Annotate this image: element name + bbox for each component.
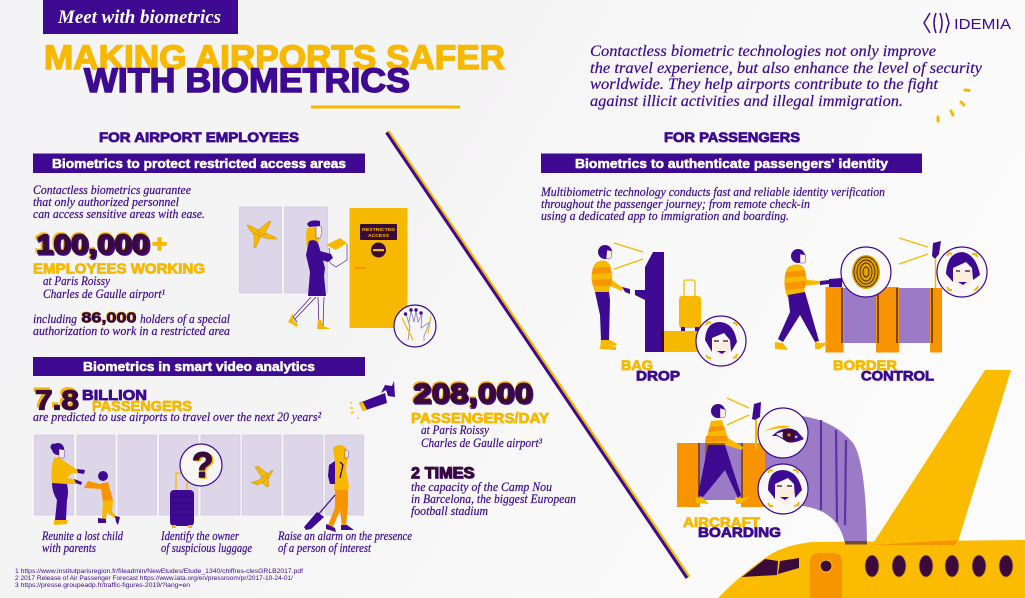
stat: 2 times: 2 TIMES — [411, 466, 475, 482]
label: bag drop: BAG — [621, 357, 653, 373]
stat: 100,000+ employees: Charles de Gaulle airport¹ — [43, 287, 165, 301]
stat: 7.8 billion passengers: BILLION — [82, 388, 147, 404]
text block: contactless: can access sensitive areas with ease. — [33, 207, 205, 221]
illustration: suspicious luggage — [170, 444, 222, 528]
intro text — [590, 43, 983, 110]
stat: 7.8 billion passengers: 7.8 — [35, 384, 79, 416]
airplane — [718, 370, 1025, 598]
illustration: restricted door and employee — [240, 207, 436, 347]
label: aircraft boarding — [683, 514, 781, 540]
stat: 100,000+ employees: EMPLOYEES WORKING — [33, 262, 205, 278]
text block: multibiometric: using a dedicated app to immigration and boarding. — [541, 209, 789, 223]
icon: hand scan — [394, 305, 436, 347]
captions: with parents — [42, 541, 96, 555]
text block: contactless: that only authorized personnel — [33, 195, 179, 209]
captions: Raise an alarm on the presence — [277, 529, 412, 543]
banner: Meet with biometrics: Meet with biometrics — [57, 7, 221, 28]
logo: IDEMIA: IDEMIA — [954, 16, 1011, 33]
panel heading: authenticate identity — [541, 154, 922, 173]
panel heading: video analytics — [33, 357, 365, 376]
logo: IDEMIA — [924, 13, 1011, 33]
title — [44, 39, 505, 107]
intro text: worldwide. They help airports contribute to the fight — [590, 76, 939, 93]
stat: 208,000 passengers per day: Charles de Gaulle airport³ — [421, 436, 542, 450]
label: border control — [833, 357, 934, 384]
title: WITH BIOMETRICS — [84, 62, 410, 100]
stat: 2 times: 2 TIMES — [411, 465, 474, 482]
label: bag drop — [621, 357, 680, 384]
footnotes: 2 2017 Release of Air Passenger Forecast https://www.iata.org/en/pressroom/pr/2017-10-24-01/ — [15, 575, 293, 582]
stat: 100,000+ employees: 100,000 — [37, 230, 151, 261]
footnotes: 3 https://presse.groupeadp.fr/traffic-figures-2019/?lang=en — [15, 582, 191, 589]
captions — [41, 529, 412, 555]
icon: face scan, boarding — [758, 464, 808, 514]
jet bridge — [765, 416, 867, 544]
label: aircraft boarding: BOARDING — [698, 524, 781, 540]
stat: 100,000+ employees: at Paris Roissy — [43, 274, 110, 288]
stat: 7.8 billion passengers: 7.8 — [33, 382, 77, 413]
decorative sparks — [938, 90, 969, 121]
illustration: border control — [775, 238, 942, 352]
employee figure — [288, 220, 347, 329]
cockpit — [742, 558, 799, 577]
icon: face scan, border control — [937, 247, 987, 297]
label: aircraft boarding: AIRCRAFT — [683, 514, 760, 530]
icon: face scan, bag drop — [696, 316, 746, 366]
captions: Identify the owner — [160, 529, 239, 543]
cabin windows — [865, 555, 1013, 577]
stat: 100,000+ employees: 86,000 — [82, 310, 136, 326]
title: MAKING AIRPORTS SAFER — [44, 39, 505, 77]
stat: 100,000+ employees: 86,000 — [81, 310, 136, 326]
stat: 208,000 passengers per day — [411, 376, 549, 450]
illustration: parent and child — [50, 443, 120, 525]
panel heading: video analytics: Biometrics in smart video analytics — [83, 360, 315, 374]
stat: 2 times: football stadium — [411, 504, 488, 518]
stat: 100,000+ employees: including — [33, 312, 77, 326]
stat: 7.8 billion passengers: are predicted to use airports to travel over the next 20 years² — [33, 409, 322, 424]
fuselage — [718, 540, 1025, 598]
text block: multibiometric — [540, 185, 885, 223]
captions: of a person of interest — [278, 541, 371, 555]
door: RESTRICTED — [362, 227, 396, 233]
stat: 7.8 billion passengers — [33, 382, 322, 424]
stat: 100,000+ employees: authorization to work in a restricted area — [33, 324, 230, 338]
illustration: suspicious luggage: ? — [194, 447, 215, 486]
icon: plane — [247, 221, 277, 248]
stat: 100,000+ employees: + — [152, 231, 167, 258]
intro text: the travel experience, but also enhance the level of security — [590, 60, 983, 77]
door — [350, 208, 408, 328]
stat: 2 times — [411, 465, 576, 518]
illustration: person of interest — [304, 445, 354, 532]
stat: 208,000 passengers per day: PASSENGERS/DAY — [411, 411, 549, 427]
label: border control: CONTROL — [861, 368, 934, 384]
diagonal divider — [386, 131, 689, 578]
stat: 100,000+ employees: 100,000 — [34, 227, 150, 258]
stat: 2 times: in Barcelona, the biggest European — [411, 492, 576, 506]
illustration: suspicious luggage: ? — [192, 446, 213, 485]
window panes — [34, 435, 364, 515]
icon: eye scan — [758, 408, 808, 458]
stat: 2 times: the capacity of the Camp Nou — [411, 480, 552, 494]
text block: contactless: Contactless biometrics guarantee — [33, 183, 191, 197]
heading: for passengers: FOR PASSENGERS — [664, 130, 800, 145]
heading: for airport employees: FOR AIRPORT EMPLOYEES — [99, 130, 299, 145]
text block: multibiometric: Multibiometric technology conducts fast and reliable identity verification — [540, 185, 885, 199]
stat: 208,000 passengers per day: 208,000 — [412, 376, 533, 407]
stat: 208,000 passengers per day: 208,000 — [413, 378, 533, 408]
stat: 100,000+ employees: 100,000 — [36, 228, 149, 260]
footnotes — [15, 568, 303, 589]
tail — [872, 370, 1011, 545]
stat: 100,000+ employees: holders of a special — [140, 312, 230, 326]
cabin door — [810, 553, 842, 598]
label: bag drop: DROP — [636, 368, 680, 384]
text block: multibiometric: throughout the passenger journey; from remote check-in — [541, 197, 810, 211]
label: border control: BORDER — [833, 357, 897, 373]
stat: 7.8 billion passengers: PASSENGERS — [92, 399, 192, 415]
text block: contactless — [33, 183, 205, 221]
captions: Reunite a lost child — [41, 529, 124, 543]
footnotes: 1 https://www.institutparisregion.fr/fileadmin/NewEtudes/Etude_1340/chiffres-clesGRLB2017.pdf — [15, 568, 303, 575]
stat: 100,000+ employees — [33, 227, 230, 338]
stat: 208,000 passengers per day: at Paris Roissy — [421, 423, 489, 437]
panel heading: restricted access: Biometrics to protect restricted access areas — [52, 157, 346, 171]
intro text: against illicit activities and illegal immigration. — [590, 93, 903, 110]
intro text: Contactless biometric technologies not only improve — [590, 43, 936, 60]
icon: fingerprint — [841, 247, 891, 297]
panel heading: authenticate identity: Biometrics to authenticate passengers' identity — [575, 157, 888, 171]
illustration: bag drop — [592, 243, 702, 352]
icon: security camera — [350, 381, 395, 419]
stat: 208,000 passengers per day: 208,000 — [414, 379, 534, 410]
panel heading: restricted access — [33, 154, 365, 173]
icon: plane — [251, 466, 273, 487]
door: ACCESS — [368, 233, 390, 239]
windows — [240, 207, 328, 293]
banner: Meet with biometrics — [43, 0, 238, 34]
illustration: aircraft boarding — [677, 398, 765, 507]
captions: of suspicious luggage — [161, 541, 252, 555]
